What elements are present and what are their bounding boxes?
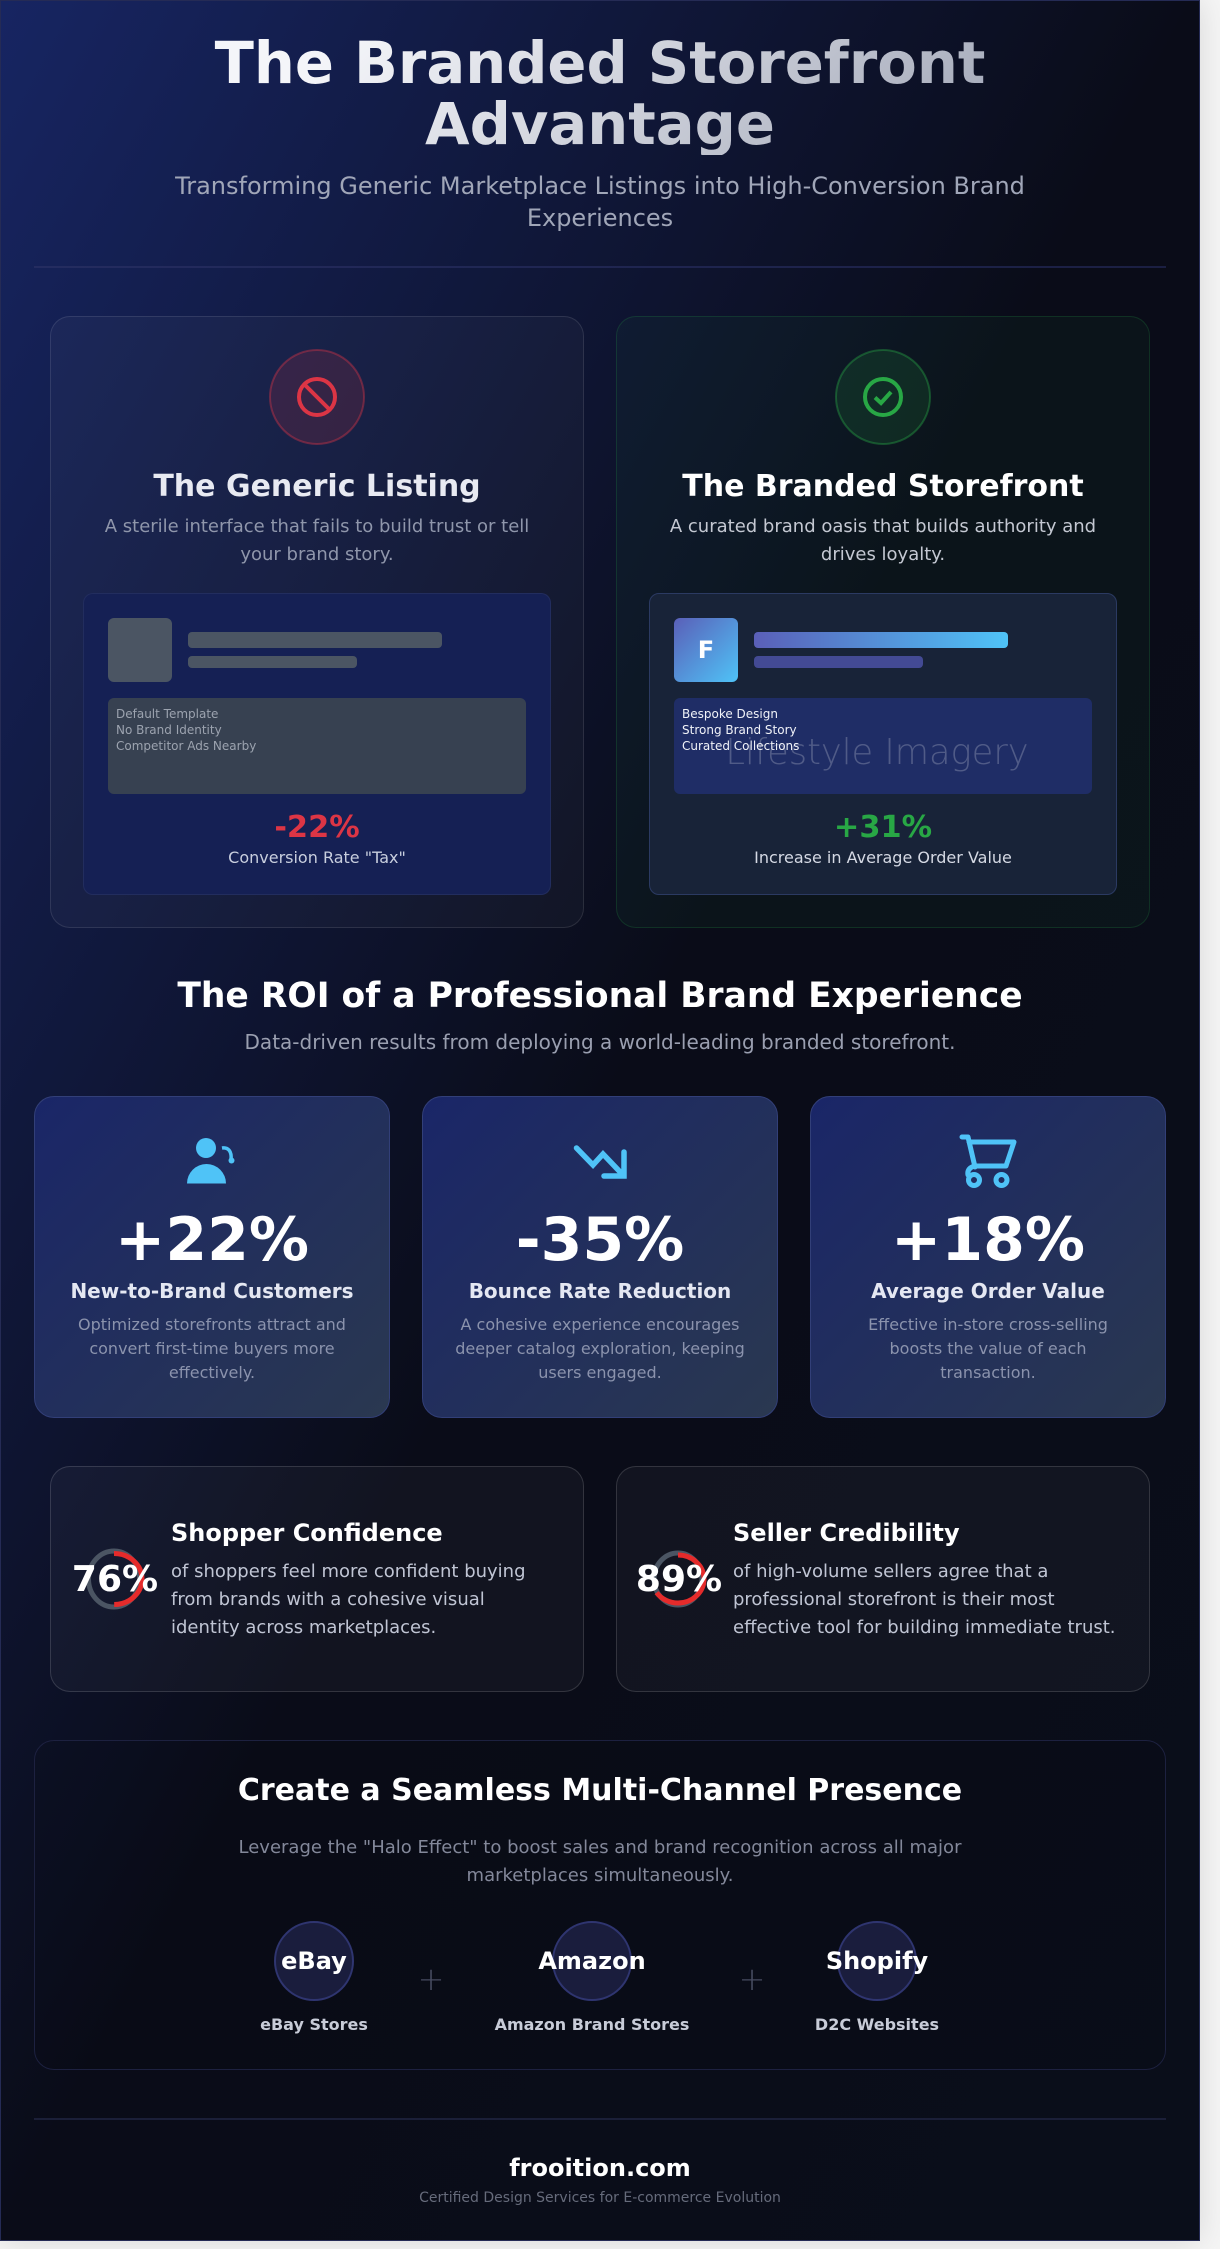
section subtitle: Data-driven results from deploying a world-leading branded storefront. xyxy=(245,1030,955,1054)
brand logo: F xyxy=(698,636,714,664)
channel: eBay xyxy=(260,1921,368,2034)
icon: ban xyxy=(269,349,365,445)
description: drives loyalty. xyxy=(821,544,945,565)
panel: branded storefront xyxy=(616,316,1150,928)
content block xyxy=(108,698,526,794)
donut: 76 percent xyxy=(86,1548,144,1610)
donut: 89 percent xyxy=(652,1550,706,1608)
description: professional storefront is their most xyxy=(733,1589,1055,1610)
heading: The Generic Listing xyxy=(153,469,481,504)
description: Optimized storefronts attract and xyxy=(78,1315,346,1334)
channel: Amazon: Amazon xyxy=(538,1947,646,1975)
panel: generic listing xyxy=(50,316,584,928)
title: The Branded Storefront xyxy=(215,30,985,97)
subtitle: Transforming Generic Marketplace Listings into High-Conversion Brand xyxy=(175,172,1025,200)
metric label: Conversion Rate "Tax" xyxy=(228,848,406,867)
value: +18% xyxy=(891,1205,1085,1275)
channel: Shopify xyxy=(815,1921,939,2034)
brand logo xyxy=(674,618,738,682)
value: -35% xyxy=(516,1205,684,1275)
stat card: AOV xyxy=(810,1096,1166,1418)
panel: shopper confidence xyxy=(50,1466,584,1692)
description xyxy=(105,516,529,565)
value: 76% xyxy=(72,1559,158,1600)
metric: +31% xyxy=(834,810,932,845)
description: identity across marketplaces. xyxy=(171,1617,436,1638)
brand: frooition.com xyxy=(509,2154,691,2182)
channel: eBay: eBay Stores xyxy=(260,2015,368,2034)
description: Effective in-store cross-selling xyxy=(868,1315,1108,1334)
description xyxy=(868,1315,1108,1382)
description: of shoppers feel more confident buying xyxy=(171,1561,526,1582)
lifestyle block: Strong Brand Story xyxy=(682,723,797,737)
description xyxy=(733,1561,1116,1638)
stat card: new-to-brand xyxy=(34,1096,390,1418)
description: Leverage the "Halo Effect" to boost sales and brand recognition across all major xyxy=(238,1837,961,1858)
description: users engaged. xyxy=(538,1363,662,1382)
description: deeper catalog exploration, keeping xyxy=(455,1339,745,1358)
value: +22% xyxy=(115,1205,309,1275)
value: 89% xyxy=(636,1559,722,1600)
title: Advantage xyxy=(425,90,775,158)
tagline: Certified Design Services for E-commerce Evolution xyxy=(419,2190,781,2206)
description: A curated brand oasis that builds authority and xyxy=(670,516,1096,537)
description xyxy=(78,1315,346,1382)
heading: The Branded Storefront xyxy=(682,469,1084,504)
mockup: branded xyxy=(649,593,1117,895)
description: A cohesive experience encourages xyxy=(460,1315,739,1334)
channel: eBay: eBay xyxy=(281,1947,347,1975)
icon: trend down xyxy=(574,1145,627,1179)
content block: Competitor Ads Nearby xyxy=(116,739,256,753)
description xyxy=(171,1561,526,1638)
heading: Create a Seamless Multi-Channel Presence xyxy=(238,1773,962,1808)
mockup: generic xyxy=(83,593,551,895)
description: transaction. xyxy=(940,1363,1036,1382)
panel: multi-channel xyxy=(34,1740,1166,2070)
title xyxy=(34,34,1166,155)
label: New-to-Brand Customers xyxy=(70,1279,354,1303)
subtitle: Experiences xyxy=(527,204,673,232)
description: of high-volume sellers agree that a xyxy=(733,1561,1048,1582)
content block: No Brand Identity xyxy=(116,723,222,737)
channel: Shopify: Shopify xyxy=(826,1947,928,1975)
label: Average Order Value xyxy=(871,1279,1105,1303)
icon: customer xyxy=(187,1138,234,1184)
subtitle xyxy=(175,172,1025,232)
panel: seller credibility xyxy=(616,1466,1150,1692)
lifestyle block: Lifestyle Imagery xyxy=(725,732,1029,773)
heading: Seller Credibility xyxy=(733,1519,960,1547)
metric label: Increase in Average Order Value xyxy=(754,848,1012,867)
description: your brand story. xyxy=(240,544,394,565)
heading: Shopper Confidence xyxy=(171,1519,443,1547)
content block: Default Template xyxy=(116,707,218,721)
description: effective tool for building immediate trust. xyxy=(733,1617,1116,1638)
lifestyle block xyxy=(674,698,1092,794)
metric: -22% xyxy=(274,810,360,845)
label: Bounce Rate Reduction xyxy=(469,1279,731,1303)
plus: + xyxy=(739,1960,765,1998)
plus: + xyxy=(418,1960,444,1998)
description xyxy=(455,1315,745,1382)
description: marketplaces simultaneously. xyxy=(467,1865,733,1886)
stat card: bounce xyxy=(422,1096,778,1418)
description xyxy=(238,1837,962,1886)
description: from brands with a cohesive visual xyxy=(171,1589,485,1610)
lifestyle block: Curated Collections xyxy=(682,739,799,753)
logo placeholder xyxy=(108,618,172,682)
icon: cart xyxy=(960,1134,1016,1188)
description: convert first-time buyers more xyxy=(89,1339,335,1358)
channel: Shopify: D2C Websites xyxy=(815,2015,939,2034)
lifestyle block: Bespoke Design xyxy=(682,707,778,721)
icon: check xyxy=(835,349,931,445)
description xyxy=(670,516,1096,565)
description: boosts the value of each xyxy=(890,1339,1086,1358)
section heading: ROI: The ROI of a Professional Brand Experience xyxy=(177,976,1023,1016)
description: effectively. xyxy=(169,1363,255,1382)
footer xyxy=(419,2154,781,2206)
channel: Amazon: Amazon Brand Stores xyxy=(495,2015,689,2034)
header xyxy=(175,30,1025,232)
description: A sterile interface that fails to build trust or tell xyxy=(105,516,529,537)
channel: Amazon xyxy=(494,1921,689,2034)
